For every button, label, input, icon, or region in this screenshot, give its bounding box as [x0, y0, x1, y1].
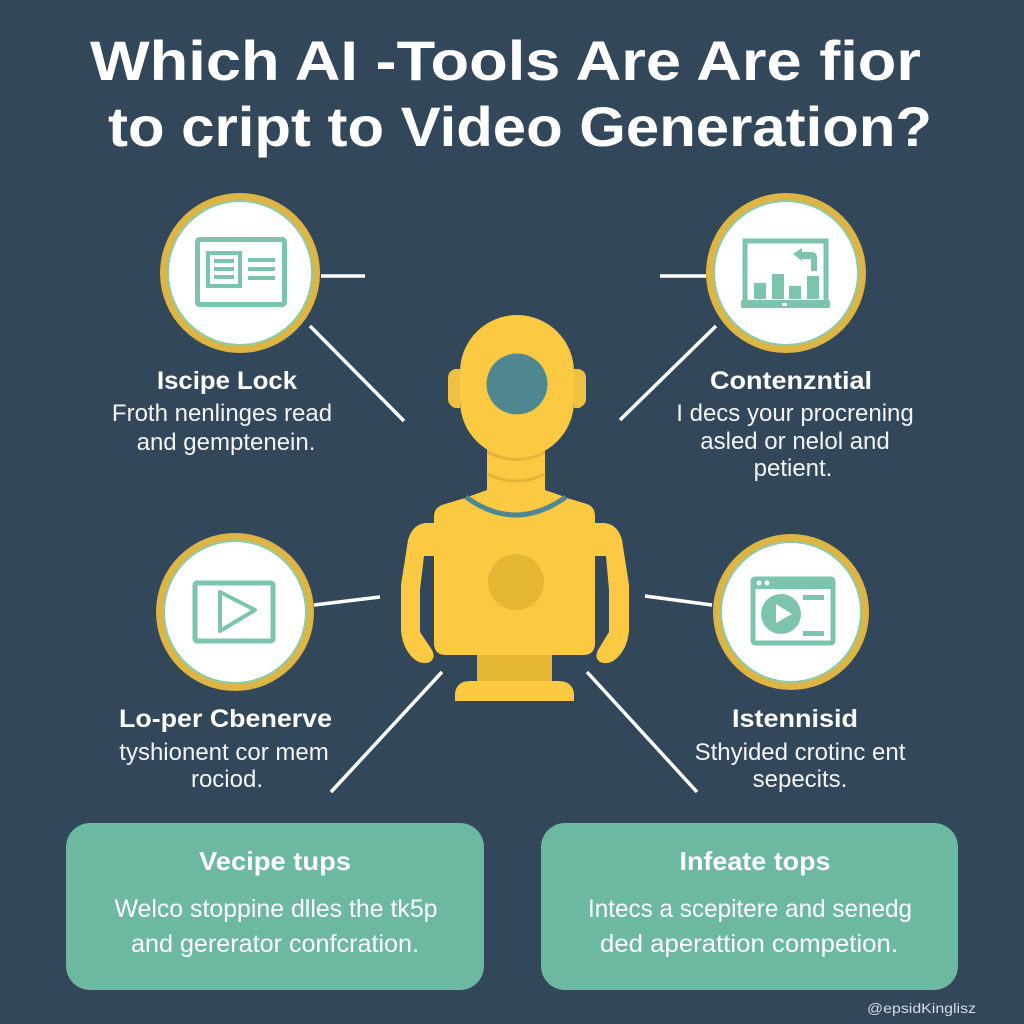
label: top right: asled or nelol and — [700, 428, 890, 455]
label: top left: Froth nenlinges read — [112, 400, 332, 427]
label: top left: and gemptenein. — [137, 429, 315, 456]
robot illustration — [401, 315, 629, 701]
label: bottom right — [695, 705, 906, 793]
panel: left card — [66, 823, 484, 990]
icon: video play badge — [156, 533, 314, 691]
panel: left card: Vecipe tups — [199, 846, 351, 876]
robot torso — [434, 492, 595, 655]
label: bottom left: rociod. — [191, 766, 263, 793]
robot right arm — [594, 523, 629, 663]
watermark: @epsidKinglisz — [867, 1000, 976, 1016]
robot ears — [448, 369, 586, 408]
label: top left: Iscipe Lock — [157, 367, 297, 395]
label: top right — [676, 367, 914, 482]
title — [90, 29, 932, 158]
robot chest light — [488, 554, 544, 610]
label: top right: petient. — [754, 455, 832, 482]
panel: right card — [541, 823, 958, 990]
icon: browser video badge — [713, 534, 869, 690]
title: Which AI -Tools Are Are fior — [90, 29, 921, 92]
robot collar — [466, 497, 566, 515]
connector lines — [310, 276, 716, 792]
label: top left — [112, 367, 332, 456]
robot stand — [477, 655, 552, 682]
panel: left card: and gererator confcration. — [131, 930, 419, 958]
label: bottom right: Sthyided crotinc ent — [695, 739, 906, 766]
label: bottom right: Istennisid — [732, 705, 858, 733]
title: to cript to Video Generation? — [108, 95, 932, 158]
robot neck — [465, 445, 568, 498]
panel: right card: Intecs a scepitere and senedg — [588, 895, 912, 923]
label: bottom left: tyshionent cor mem — [119, 739, 329, 766]
robot head — [460, 315, 574, 458]
icon: document badge — [160, 193, 320, 353]
label: top right: Contenzntial — [710, 367, 872, 395]
robot base — [455, 681, 574, 701]
label: top right: I decs your procrening — [676, 400, 914, 427]
label: bottom left: Lo-per Cbenerve — [119, 705, 332, 733]
panel: right card: ded aperattion competion. — [600, 930, 898, 958]
robot left arm — [401, 523, 436, 663]
label: bottom right: sepecits. — [753, 766, 847, 793]
panel: right card: Infeate tops — [680, 846, 830, 876]
panel: left card: Welco stoppine dlles the tk5p — [114, 895, 438, 923]
icon: laptop chart badge — [706, 193, 866, 353]
label: bottom left — [119, 705, 332, 793]
robot eye — [486, 354, 548, 414]
